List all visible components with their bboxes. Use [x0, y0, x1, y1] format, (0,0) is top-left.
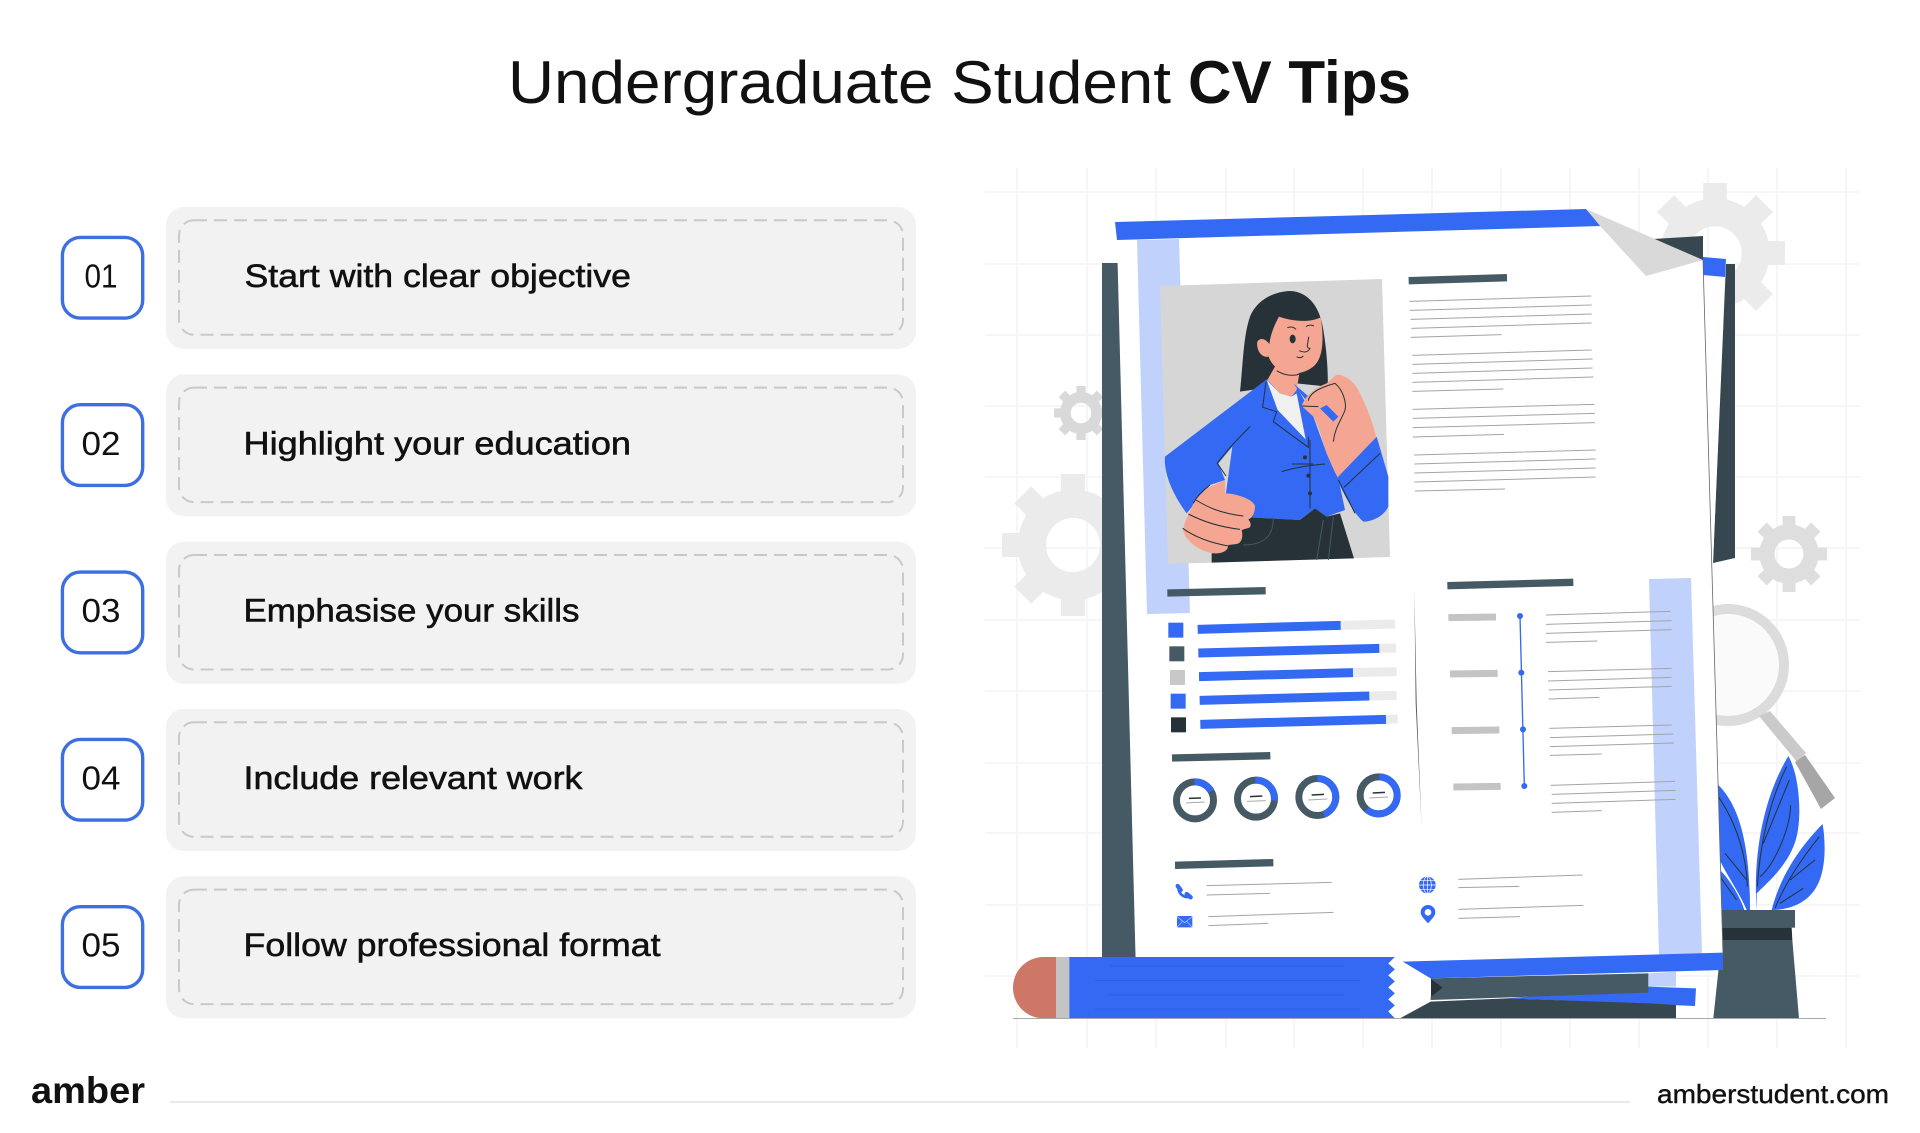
tip 01: 01 [84, 258, 118, 294]
book stack at base [1400, 953, 1723, 1018]
footer logo: amber [31, 1070, 145, 1111]
tip 02: 02 [82, 425, 120, 462]
tip 04: 04 [82, 760, 120, 796]
raised hand [1302, 375, 1376, 478]
icon: large gear left [1002, 474, 1144, 616]
tip 05: Follow professional format [244, 927, 661, 963]
ground line [1013, 1018, 1826, 1020]
footer rule [170, 1101, 1630, 1103]
plant in pot [1713, 756, 1825, 1018]
jacket [1165, 379, 1345, 520]
pencil [1013, 957, 1443, 1018]
tip 02: Highlight your education [244, 425, 631, 461]
tip 05: 05 [82, 926, 120, 964]
portrait photo [1160, 279, 1390, 564]
icon: location pin [1421, 905, 1435, 923]
skills section [1167, 591, 1398, 819]
title: Undergraduate Student [508, 49, 1171, 116]
icon: mail [1177, 916, 1192, 927]
tips list [62, 207, 916, 1018]
tip 03: Emphasise your skills [244, 593, 580, 629]
right sleeve [1337, 437, 1388, 522]
tip 02 [62, 374, 916, 516]
icon: small gear right [1751, 516, 1827, 592]
profile text block [1409, 278, 1596, 491]
icon: phone [1178, 886, 1191, 897]
experience timeline [1414, 582, 1676, 828]
illustration: CV document scene [985, 168, 1860, 1048]
tip 04 [62, 709, 916, 851]
hair [1240, 291, 1328, 392]
fist [1183, 480, 1255, 553]
skirt [1212, 508, 1354, 563]
back cover and pages [1102, 236, 1735, 965]
tip 05 [62, 876, 916, 1018]
face [1257, 317, 1323, 374]
tip 03 [62, 542, 916, 684]
icon: small gear left [1054, 386, 1108, 440]
tip 03: 03 [82, 592, 120, 629]
tip 01 [62, 207, 916, 349]
donut charts [1176, 776, 1398, 819]
title [508, 49, 1411, 116]
background grid [985, 168, 1860, 1048]
title: CV Tips [1188, 49, 1411, 116]
skill bars [1198, 624, 1398, 724]
footer url: amberstudent.com [1657, 1079, 1889, 1109]
tip 04: Include relevant work [244, 760, 584, 796]
CV page [1115, 209, 1723, 975]
icon: large gear top right [1645, 183, 1785, 323]
tip 01: Start with clear objective [244, 258, 631, 294]
shirt [1267, 380, 1306, 439]
icon: globe [1419, 877, 1436, 893]
contact section [1175, 863, 1583, 927]
icon: magnifying glass [1672, 609, 1835, 809]
neck [1267, 367, 1299, 397]
